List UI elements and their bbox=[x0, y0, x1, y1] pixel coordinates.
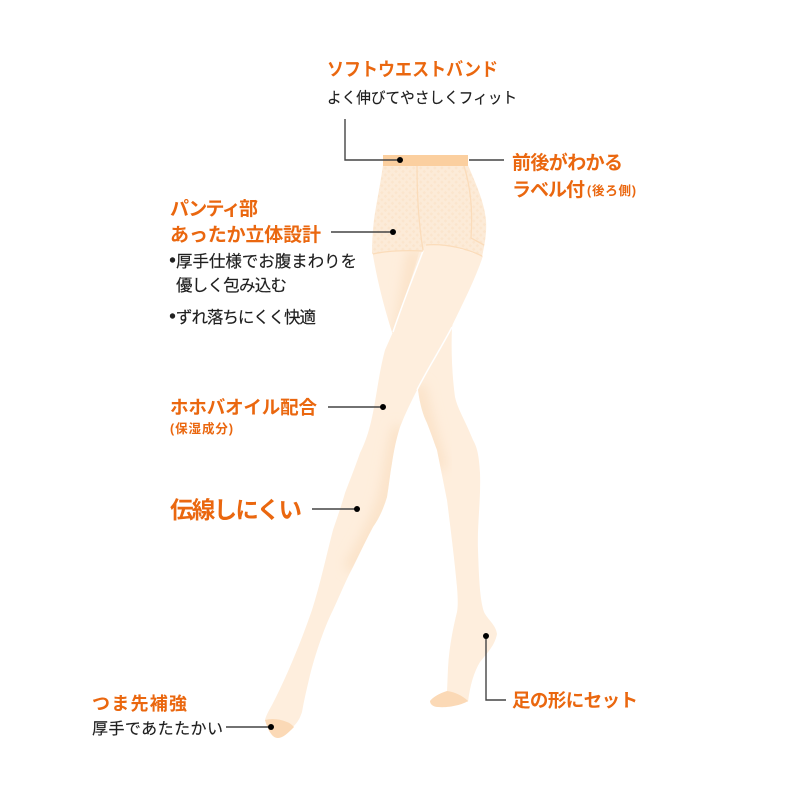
toe reinforcement, rear foot bbox=[430, 691, 468, 707]
callout: soft waistband: よく伸びてやさしくフィット bbox=[327, 89, 517, 107]
white edge lines where the legs cross bbox=[393, 251, 452, 390]
callout: panty section: パンティ部 bbox=[170, 198, 258, 220]
front leg with toe bbox=[265, 245, 483, 732]
callout: jojoba oil bbox=[170, 397, 386, 436]
callout: run resistant: 伝線しにくい bbox=[170, 497, 302, 523]
callout: panty section: ずれ落ちにくく快適 bbox=[176, 308, 316, 327]
callout: run resistant bbox=[170, 497, 360, 523]
callout: panty section: 厚手仕様でお腹まわりを bbox=[176, 252, 357, 271]
callout: panty section: 優しく包み込む bbox=[176, 276, 287, 295]
callout: front-back label bbox=[469, 151, 636, 201]
tights illustration bbox=[265, 155, 497, 738]
callout: jojoba oil: ホホバオイル配合 bbox=[170, 397, 317, 418]
callout: reinforced toe: 厚手であたたかい bbox=[92, 720, 223, 738]
waistband bbox=[383, 155, 468, 166]
callout: foot shape set bbox=[483, 633, 638, 711]
rear leg with heel and foot bbox=[372, 250, 497, 702]
callout: jojoba oil: (保湿成分) bbox=[170, 421, 233, 436]
callout: panty section bbox=[170, 198, 396, 327]
callout: front-back label: 前後がわかる bbox=[512, 151, 623, 174]
callout: front-back label: (後ろ側) bbox=[587, 183, 636, 198]
callout: panty section: あったか立体設計 bbox=[170, 223, 321, 246]
callout: soft waistband: ソフトウエストバンド bbox=[327, 59, 498, 80]
callout: reinforced toe: つま先補強 bbox=[92, 694, 187, 714]
callout: front-back label: ラベル付 bbox=[512, 179, 585, 201]
panty section with mesh pattern bbox=[372, 165, 486, 257]
callout: reinforced toe bbox=[92, 694, 274, 738]
toe reinforcement, front foot bbox=[265, 719, 294, 738]
callout: foot shape set: 足の形にセット bbox=[512, 690, 638, 711]
callout: soft waistband bbox=[327, 59, 517, 163]
